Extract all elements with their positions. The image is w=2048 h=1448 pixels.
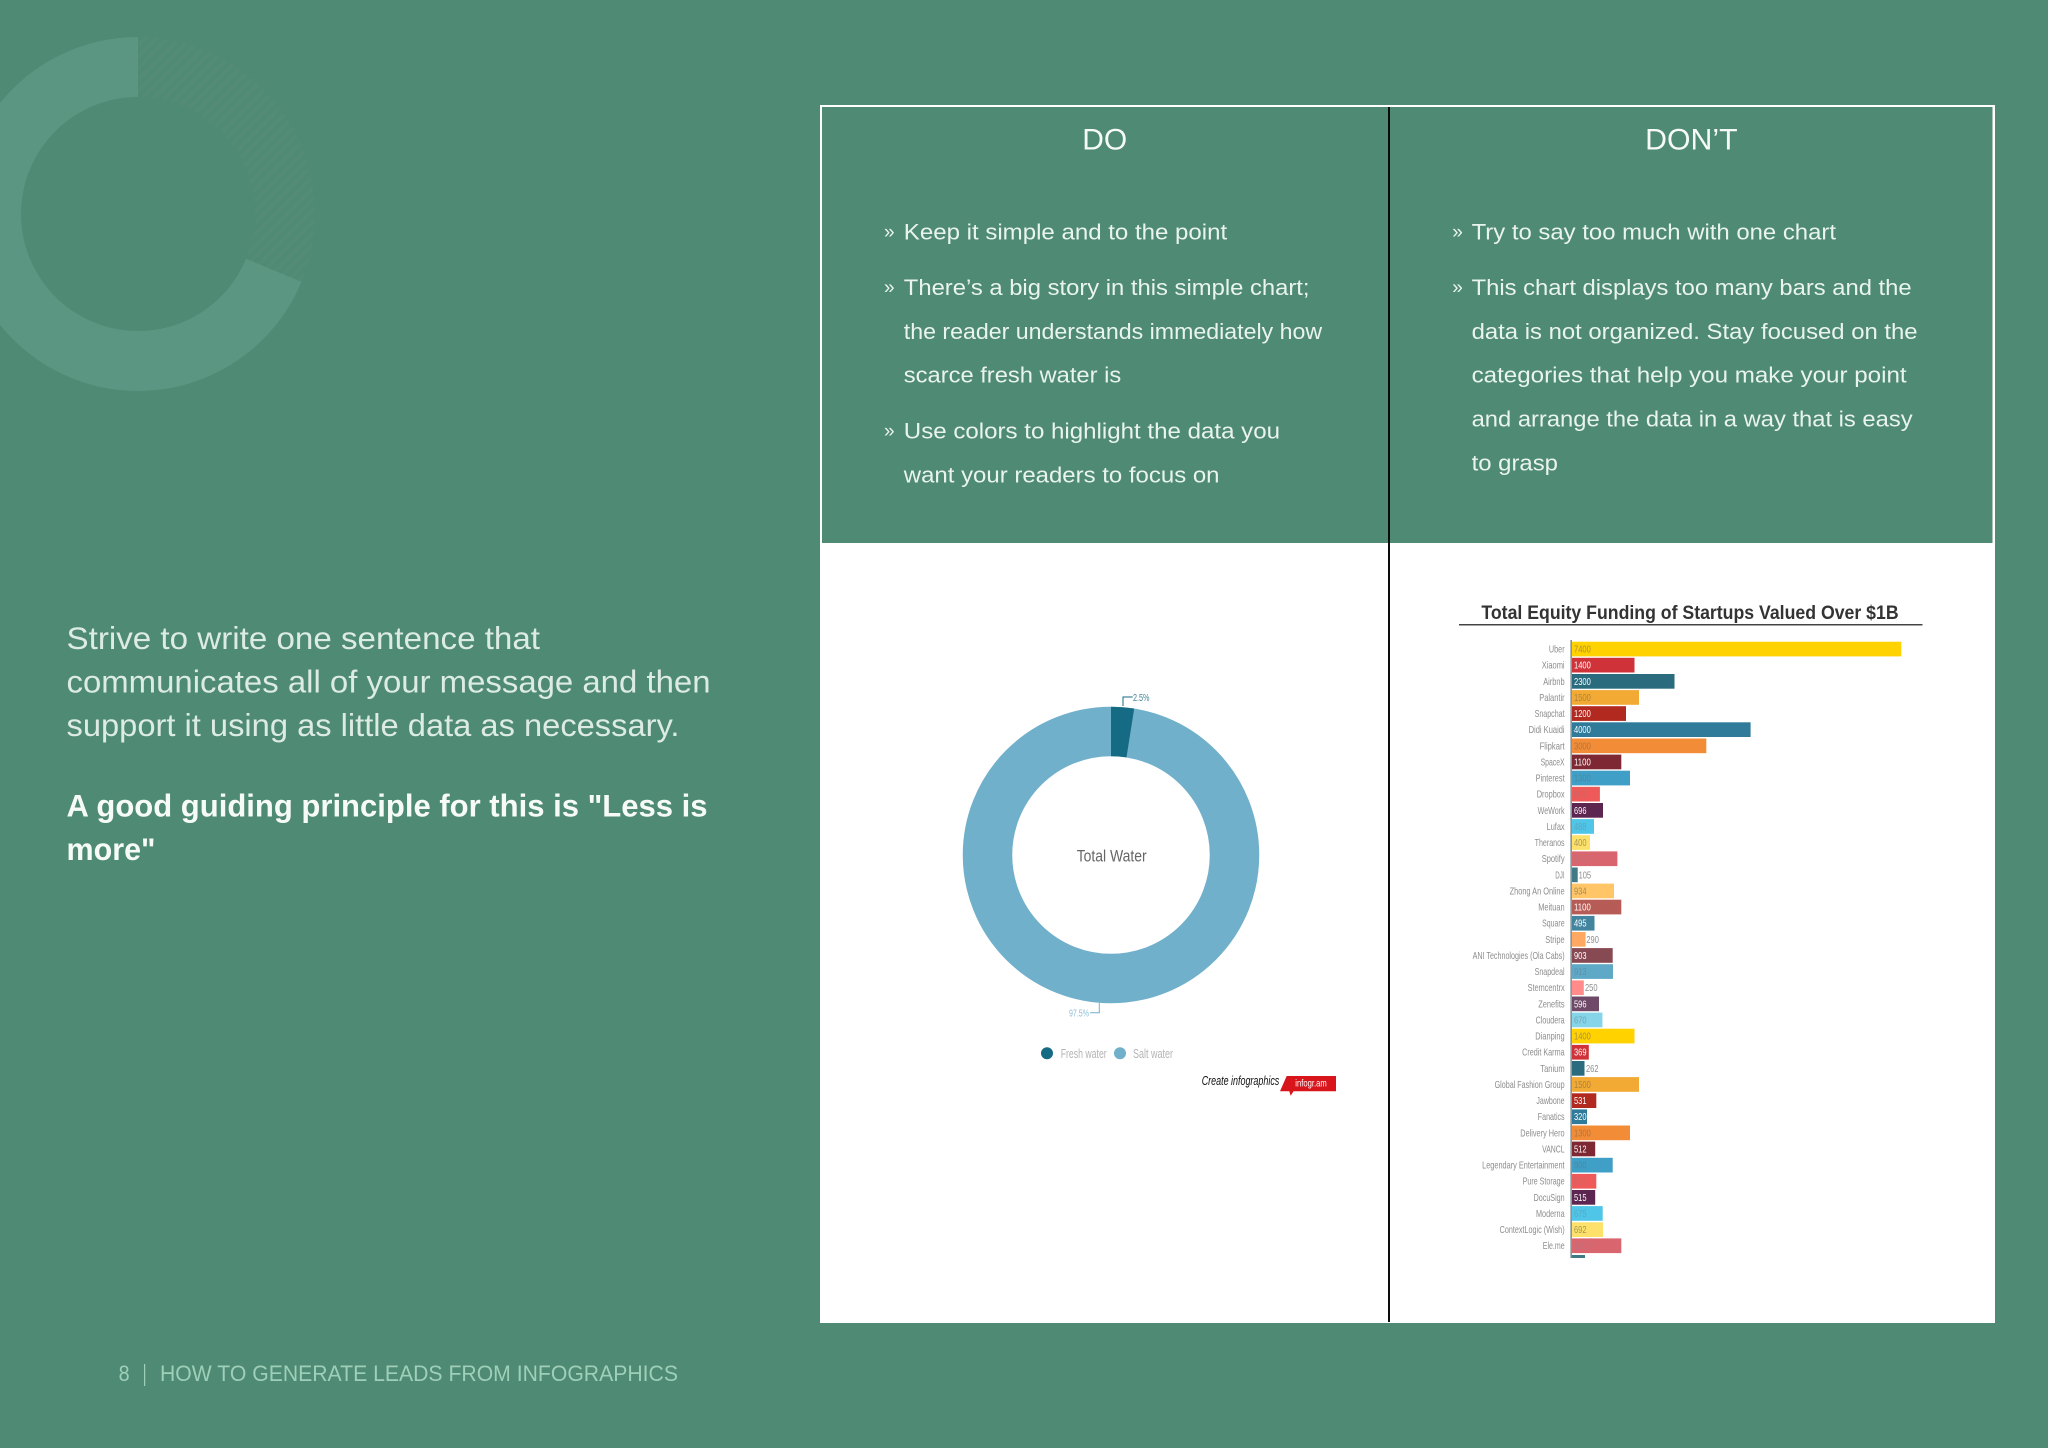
clipped final bar — [1571, 1255, 1585, 1258]
bar: Dropbox: Dropbox — [1537, 789, 1565, 801]
DO list: » — [884, 222, 895, 243]
heading: DON'T: DON’T — [1645, 123, 1738, 156]
bar: Global Fashion Group: Global Fashion Group — [1495, 1079, 1565, 1091]
bar: Credit Karma: 369 — [1574, 1047, 1587, 1059]
bar: Zhong An Online — [1510, 884, 1614, 898]
bar: Didi Kuaidi: Didi Kuaidi — [1529, 724, 1565, 736]
bar axis — [1570, 640, 1572, 1258]
bar: Snapdeal: 913 — [1574, 966, 1587, 978]
bar: Pinterest — [1536, 771, 1630, 785]
legend: Salt water — [1133, 1047, 1173, 1061]
bar: Meituan — [1538, 900, 1621, 914]
bar: Spotify: Spotify — [1542, 853, 1565, 865]
bar: Dropbox — [1537, 787, 1600, 802]
bar: Didi Kuaidi — [1529, 722, 1751, 737]
bar: Square: 495 — [1574, 918, 1587, 930]
DON'T list: This chart displays too many bars and the — [1472, 275, 1912, 300]
DON'T list: data is not organized. Stay focused on the — [1472, 319, 1918, 344]
bar: DocuSign: DocuSign — [1534, 1192, 1565, 1204]
bar: Zenefits: Zenefits — [1538, 998, 1565, 1010]
DO list: » — [884, 278, 895, 299]
bar: Palantir — [1539, 690, 1639, 705]
bar: Xiaomi: Xiaomi — [1542, 660, 1565, 672]
bar: Legendary Entertainment: Legendary Entertainment — [1482, 1160, 1565, 1172]
bar: Global Fashion Group — [1495, 1077, 1639, 1092]
bar: Palantir: Palantir — [1539, 692, 1565, 704]
bar: Lufax — [1547, 819, 1594, 834]
bar: Dropbox: 607 — [1574, 789, 1587, 801]
bar: Moderna: Moderna — [1536, 1208, 1565, 1220]
bar: DJI: 105 — [1579, 869, 1591, 881]
bar: DJI: DJI — [1555, 869, 1565, 881]
bar: Cloudera: 670 — [1574, 1014, 1587, 1026]
bar: Flipkart — [1540, 738, 1706, 753]
comparison panel — [820, 105, 1995, 1323]
bar: Snapchat: Snapchat — [1535, 708, 1565, 720]
DO list: scarce fresh water is — [904, 362, 1121, 387]
bar: ANI Technologies: 903 — [1574, 950, 1587, 962]
bar: ANI Technologies: ANI Technologies (Ola Cabs) — [1473, 950, 1565, 962]
center label: Total Water — [1077, 847, 1147, 866]
bar: Stripe — [1545, 932, 1599, 947]
bar: SpaceX — [1541, 755, 1621, 769]
heading: DO: DO — [1082, 123, 1127, 156]
bar: VANCL: 512 — [1574, 1143, 1587, 1155]
bar: Zenefits — [1538, 996, 1599, 1011]
bar: Stripe: 290 — [1586, 934, 1599, 946]
DO list: the reader understands immediately how — [904, 319, 1323, 344]
bar: Stripe: Stripe — [1545, 934, 1565, 946]
bar: Jawbone: Jawbone — [1536, 1095, 1565, 1107]
bar: Zhong An Online: 934 — [1574, 885, 1587, 897]
bar: DJI — [1555, 868, 1591, 882]
bar: Snapchat — [1535, 706, 1626, 721]
bar: Spotify — [1542, 851, 1617, 866]
bar: Cloudera: Cloudera — [1536, 1014, 1565, 1026]
legend — [1041, 1047, 1173, 1061]
bar: DocuSign — [1534, 1190, 1595, 1205]
decorative donut watermark — [0, 37, 315, 391]
bar: WeWork — [1538, 803, 1603, 818]
bar: Tanium: 262 — [1586, 1063, 1599, 1075]
salt water ring — [988, 732, 1234, 978]
DO list: Keep it simple and to the point — [904, 219, 1228, 244]
bar: Snapdeal: Snapdeal — [1535, 966, 1565, 978]
bar: Snapdeal — [1535, 964, 1613, 979]
infogr.am credit: Create infographics — [1202, 1074, 1279, 1088]
callout: 2.5%: 2.5% — [1133, 693, 1150, 704]
bar: Ele.me — [1543, 1238, 1621, 1253]
DO list: Use colors to highlight the data you — [904, 418, 1280, 443]
title rule — [1459, 624, 1922, 626]
bar: Uber — [1549, 642, 1901, 656]
intro text block: support it using as little data as necessary. — [66, 707, 680, 743]
bar: DocuSign: 515 — [1574, 1192, 1587, 1204]
bar: SpaceX: 1100 — [1574, 756, 1591, 768]
bar: Credit Karma: Credit Karma — [1522, 1047, 1565, 1059]
bar chart: total equity funding — [1459, 603, 1922, 1258]
bar: Uber: 7400 — [1574, 644, 1591, 656]
bar: Didi Kuaidi: 4000 — [1574, 724, 1591, 736]
bar: Pure Storage — [1523, 1174, 1596, 1189]
chart title: Total Equity Funding of Startups Valued Over $1B — [1481, 603, 1899, 624]
bar: Dianping: Dianping — [1535, 1030, 1565, 1042]
legend: Fresh water — [1061, 1047, 1107, 1061]
intro text block: communicates all of your message and then — [66, 664, 710, 700]
bar: VANCL — [1542, 1142, 1595, 1156]
guiding principle callout: A good guiding principle for this is "Less is — [66, 788, 708, 824]
DON'T list: and arrange the data in a way that is easy — [1472, 406, 1913, 431]
bar: Uber: Uber — [1549, 644, 1565, 656]
callout: 97.5%: 97.5% — [1069, 1008, 1089, 1019]
bar: Dianping — [1535, 1029, 1634, 1043]
bar: Stemcentrx: 250 — [1585, 982, 1598, 994]
bar: Delivery Hero — [1520, 1126, 1630, 1140]
guiding principle callout: more" — [66, 831, 156, 867]
bar: Delivery Hero: 1300 — [1574, 1127, 1591, 1139]
bar: SpaceX: SpaceX — [1541, 756, 1565, 768]
DO list: » — [884, 421, 895, 442]
bar: Tanium: Tanium — [1540, 1063, 1565, 1075]
bar: Meituan: 1100 — [1574, 902, 1591, 914]
intro text block — [66, 620, 710, 743]
intro text block: Strive to write one sentence that — [66, 620, 540, 656]
DON'T list: » — [1452, 222, 1463, 243]
bar: Square: Square — [1542, 918, 1565, 930]
DO list: want your readers to focus on — [903, 462, 1220, 487]
bar: Lufax: Lufax — [1547, 821, 1565, 833]
bar: WeWork: WeWork — [1538, 805, 1565, 817]
DON'T list: categories that help you make your point — [1472, 362, 1907, 387]
callout: 97.5% — [1069, 1003, 1099, 1019]
bar: Lufax: 488 — [1574, 821, 1587, 833]
bar: Zhong An Online: Zhong An Online — [1510, 885, 1565, 897]
bar: Jawbone — [1536, 1093, 1596, 1108]
bar: Ele.me: Ele.me — [1543, 1240, 1565, 1252]
donut chart: total water — [988, 693, 1336, 1096]
bar: Jawbone: 531 — [1574, 1095, 1587, 1107]
DON'T list: to grasp — [1472, 450, 1558, 475]
DON'T list: » — [1452, 278, 1463, 299]
bar: ContextLogic: 692 — [1574, 1224, 1587, 1236]
bar: Dianping: 1400 — [1574, 1030, 1591, 1042]
bar: Pure Storage: Pure Storage — [1523, 1176, 1565, 1188]
bar: Palantir: 1500 — [1574, 692, 1591, 704]
callout: 2.5% — [1123, 693, 1150, 706]
bar: Theranos — [1535, 835, 1590, 850]
bar: Spotify: 1000 — [1574, 853, 1591, 865]
guiding principle callout — [66, 788, 708, 867]
DO list: There’s a big story in this simple chart; — [904, 275, 1310, 300]
bar: WeWork: 696 — [1574, 805, 1587, 817]
bar: Square — [1542, 916, 1594, 931]
bar: Legendary Entertainment: 900 — [1574, 1160, 1587, 1172]
bar: Airbnb: Airbnb — [1543, 676, 1565, 688]
column divider — [1388, 107, 1390, 1322]
bar: Pinterest: Pinterest — [1536, 772, 1565, 784]
bar: Theranos: 400 — [1574, 837, 1587, 849]
bar: Pinterest: 1300 — [1574, 772, 1591, 784]
bar: Snapchat: 1200 — [1574, 708, 1591, 720]
bar: Flipkart: Flipkart — [1540, 740, 1565, 752]
bar: Stemcentrx — [1528, 980, 1598, 995]
infogr.am credit: infogr.am — [1295, 1077, 1327, 1089]
bar: VANCL: VANCL — [1542, 1143, 1565, 1155]
DON'T list — [1452, 219, 1918, 475]
panel frame and white chart area — [820, 105, 1995, 1323]
bar: Airbnb — [1543, 674, 1674, 689]
bar: Fanatics: Fanatics — [1538, 1111, 1565, 1123]
bar: Moderna — [1536, 1206, 1603, 1221]
infogr.am credit — [1202, 1074, 1336, 1096]
fresh water wedge — [1111, 707, 1134, 757]
DO list — [884, 219, 1323, 487]
bar: ContextLogic: ContextLogic (Wish) — [1500, 1224, 1565, 1236]
bar: Global Fashion Group: 1500 — [1574, 1079, 1591, 1091]
DON'T list: Try to say too much with one chart — [1472, 219, 1837, 244]
bar: Xiaomi — [1542, 658, 1634, 672]
footer page label: 8 — [119, 1361, 130, 1386]
bar: Tanium — [1540, 1061, 1599, 1076]
bar: Pure Storage: 530 — [1574, 1176, 1587, 1188]
bar: Xiaomi: 1400 — [1574, 660, 1591, 672]
bar: Delivery Hero: Delivery Hero — [1520, 1127, 1565, 1139]
bar: Meituan: Meituan — [1538, 902, 1565, 914]
bar: Zenefits: 596 — [1574, 998, 1587, 1010]
bar: Fanatics — [1538, 1109, 1587, 1124]
bar: Airbnb: 2300 — [1574, 676, 1591, 688]
bar: Ele.me: 1100 — [1574, 1240, 1591, 1252]
bar: Fanatics: 320 — [1574, 1111, 1587, 1123]
bar: Cloudera — [1536, 1013, 1602, 1027]
footer page label: HOW TO GENERATE LEADS FROM INFOGRAPHICS — [160, 1361, 678, 1386]
bar: Moderna: 675 — [1574, 1208, 1587, 1220]
bar: Stemcentrx: Stemcentrx — [1528, 982, 1565, 994]
bar: Theranos: Theranos — [1535, 837, 1565, 849]
bar: Flipkart: 3000 — [1574, 740, 1591, 752]
